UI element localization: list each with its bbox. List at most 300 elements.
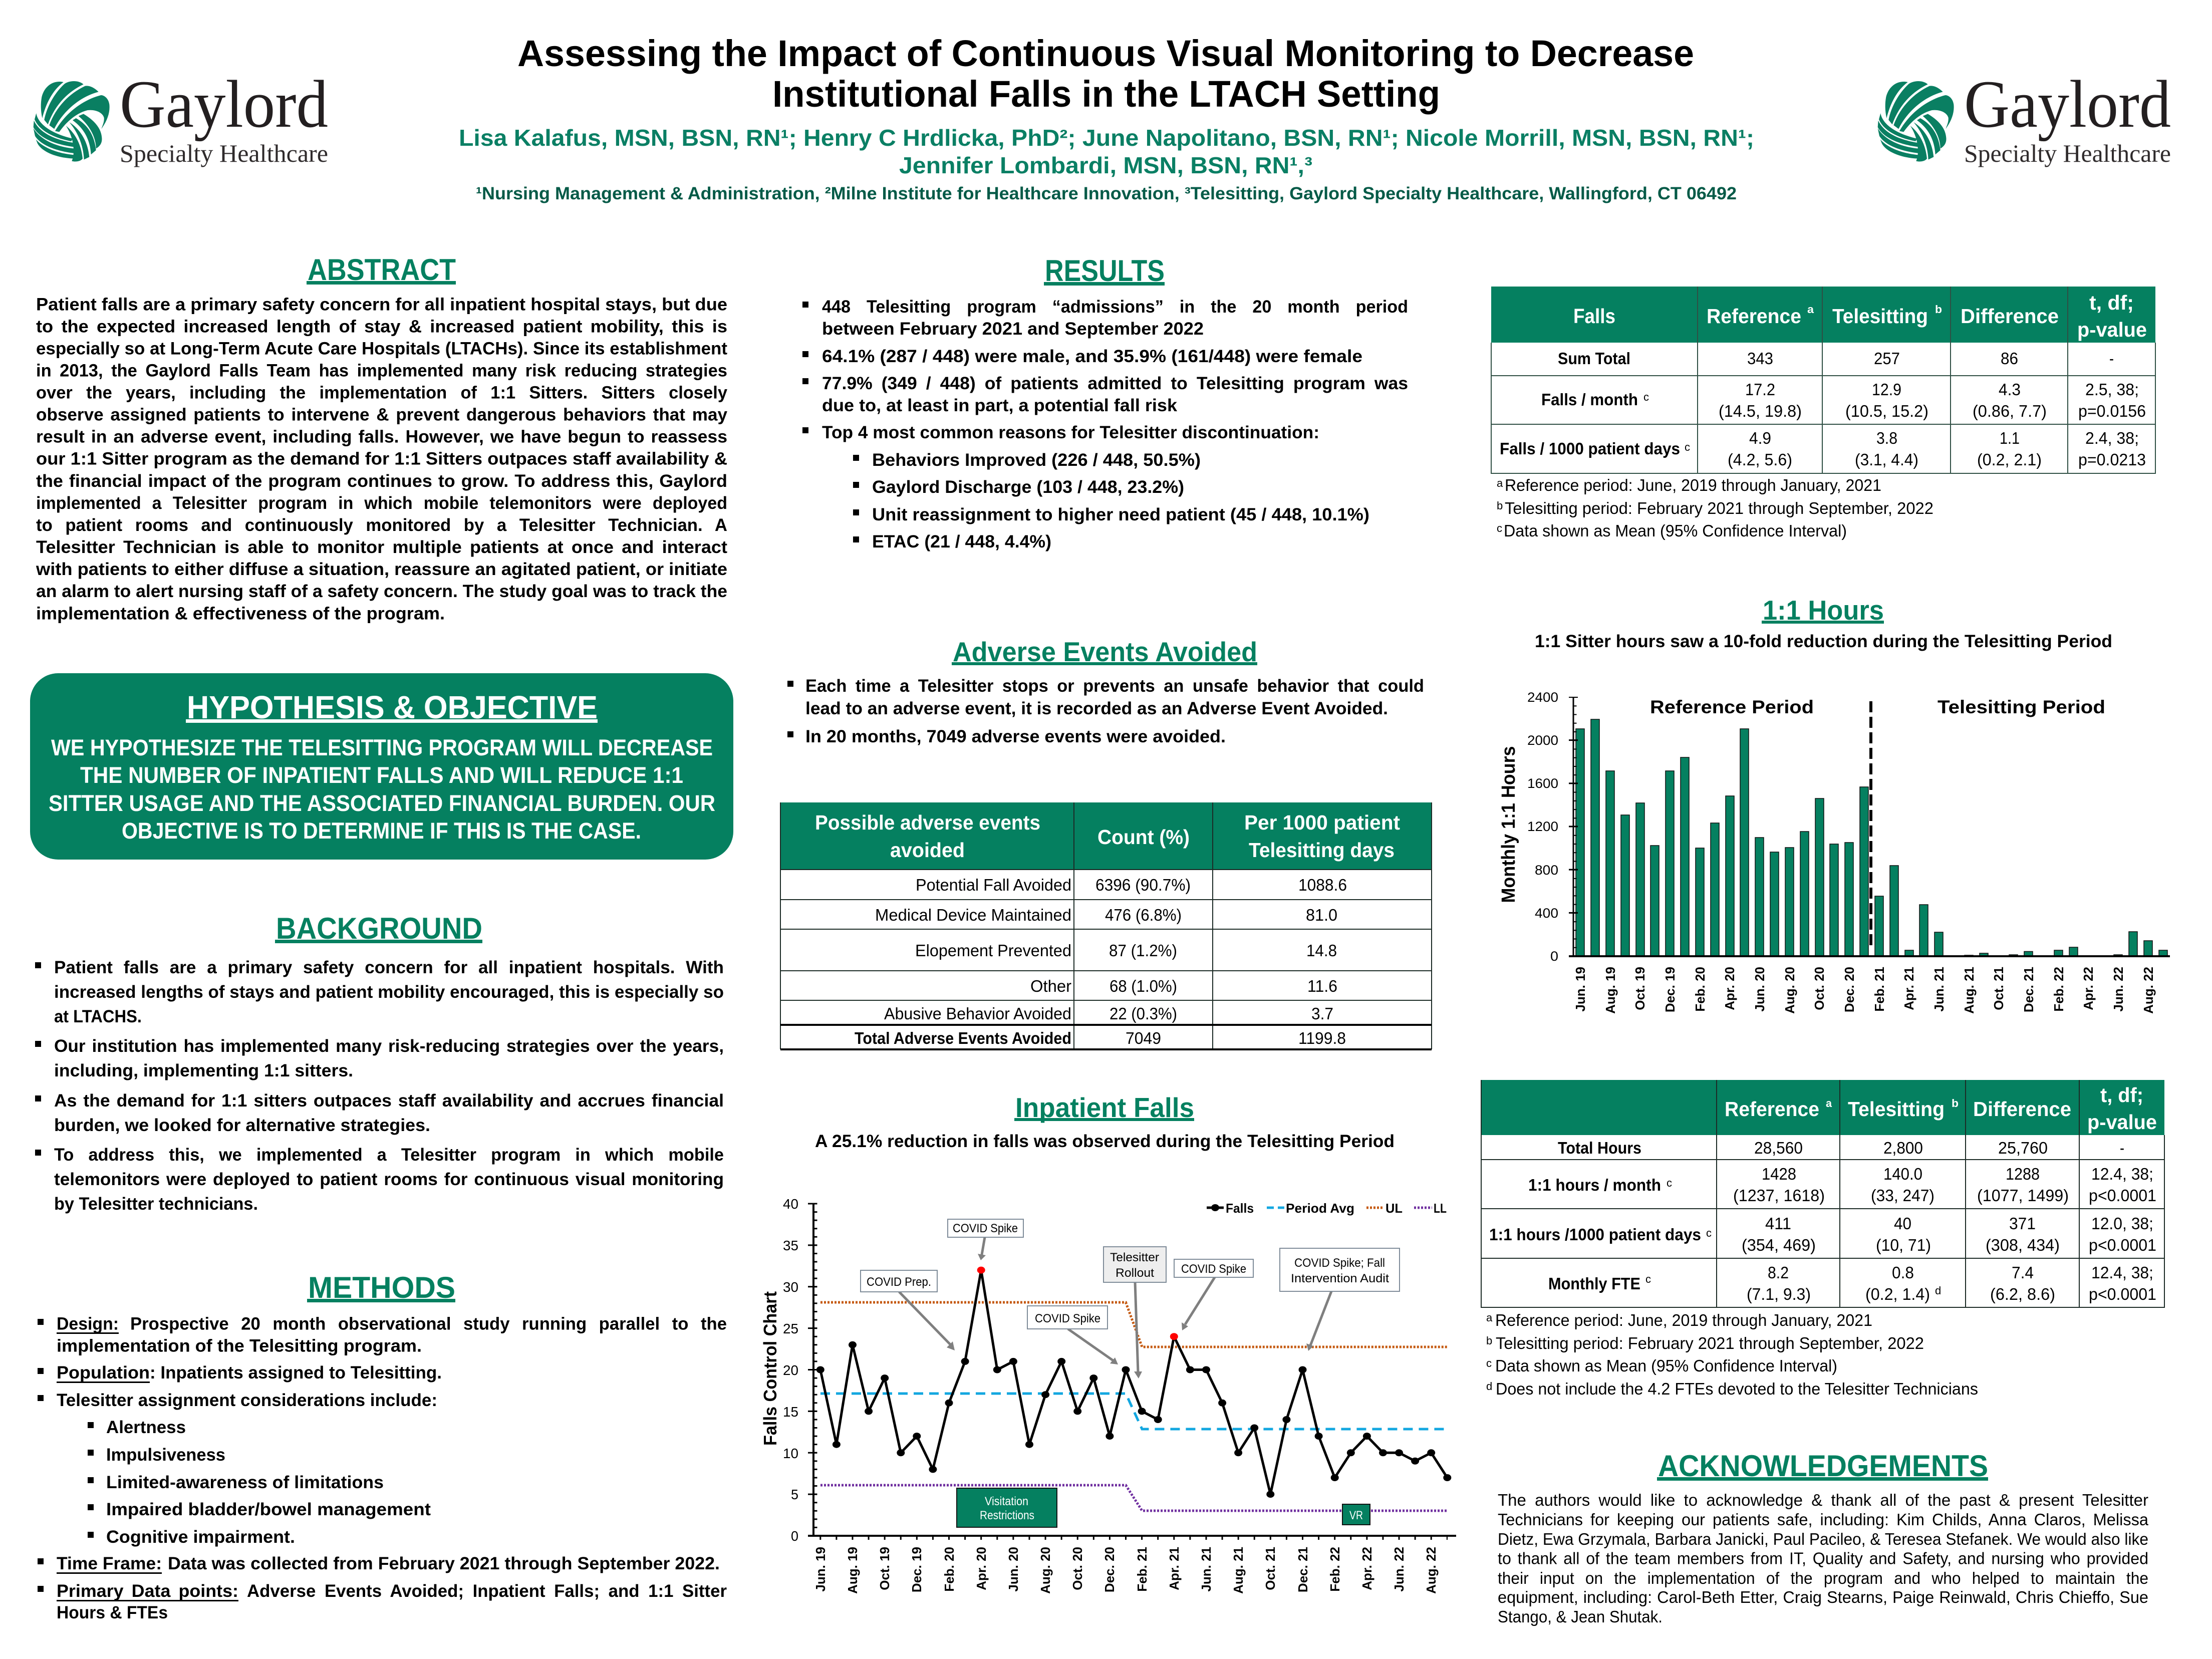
panel: background xyxy=(35,912,724,1214)
text block: hypothesis statement: WE HYPOTHESIZE THE TELESITTING PROGRAM WILL DECREASE xyxy=(51,735,713,760)
footnotes: falls table: Data shown as Mean (95% Confidence Interval) xyxy=(1504,521,1847,540)
panel: results xyxy=(802,254,1408,551)
y axis labels: 20 xyxy=(783,1362,798,1378)
y axis labels: 1200 xyxy=(1527,819,1558,834)
footnotes: 1:1 hours table: d xyxy=(1486,1380,1492,1393)
table: falls: p=0.0156 xyxy=(2078,402,2146,420)
text block: acknowledgements body xyxy=(1498,1491,2149,1626)
table: falls: p-value xyxy=(2077,318,2147,341)
text block: results bullets xyxy=(802,297,1408,551)
text block: abstract body: an alarm to alert nursing staff of a safety concern. The study goal was to track the xyxy=(36,582,727,601)
text block: abstract body: our 1:1 Sitter program as the demand for 1:1 Sitters outpaces staff availability & xyxy=(36,449,727,469)
legend: Falls xyxy=(1226,1201,1254,1216)
table: falls: (0.86, 7.7) xyxy=(1973,402,2047,420)
table: 1:1 hours: 1:1 hours / month xyxy=(1528,1176,1661,1194)
callout: COVID Spike (Dec 20) xyxy=(1027,1306,1108,1329)
callout: COVID Spike (Apr 20) xyxy=(948,1219,1023,1237)
callout: Telesitter Rollout: Telesitter xyxy=(1110,1251,1159,1264)
y axis labels: 35 xyxy=(783,1238,798,1253)
y axis labels: 2400 xyxy=(1527,690,1558,705)
table: 1:1 hours: 12.4, 38; xyxy=(2091,1263,2153,1282)
table: 1:1 hours: - xyxy=(2120,1139,2124,1157)
table: 1:1 hours: p<0.0001 xyxy=(2089,1285,2156,1303)
text block: adverse events bullets xyxy=(787,676,1424,746)
heading: methods: METHODS xyxy=(308,1271,455,1304)
table: 1:1 hours: p<0.0001 xyxy=(2089,1186,2156,1205)
affiliations: ¹Nursing Management & Administration, ²Milne Institute for Healthcare Innovation, ³Telesitting, Gaylord Specialty Healthcare, Wallingford, CT 06492 xyxy=(476,184,1737,203)
table: 1:1 hours: Telesitting xyxy=(1848,1097,1945,1121)
table: falls: 17.2 xyxy=(1745,380,1775,399)
panel: hypothesis and objective xyxy=(30,673,733,860)
text block: background bullets: by Telesitter technicians. xyxy=(54,1194,258,1214)
footnotes: falls table: a xyxy=(1497,477,1503,489)
text block: results bullets: Gaylord Discharge (103 / 448, 23.2%) xyxy=(872,477,1184,497)
footnotes: 1:1 hours table: b xyxy=(1486,1334,1492,1347)
heading: inpatient falls: Inpatient Falls xyxy=(1015,1092,1194,1123)
x axis labels: Apr. 21 xyxy=(1901,967,1916,1010)
x axis labels: Aug. 22 xyxy=(2141,967,2156,1014)
table: 1:1 hours: (6.2, 8.6) xyxy=(1990,1285,2055,1303)
panel: abstract xyxy=(36,253,728,623)
text block: acknowledgements body: Technicians for keeping our patients safe, including: Kim Childs, Anna Claros, Melissa xyxy=(1498,1510,2149,1529)
legend: UL xyxy=(1386,1201,1403,1216)
text block: results bullets: between February 2021 and September 2022 xyxy=(822,319,1204,339)
footnotes: falls table: Telesitting period: February 2021 through September, 2022 xyxy=(1505,499,1933,517)
x axis labels: Aug. 19 xyxy=(1603,967,1618,1014)
table: falls: Difference xyxy=(1961,305,2059,328)
x axis labels: Oct. 19 xyxy=(1632,967,1647,1010)
x axis labels: Feb. 22 xyxy=(1327,1547,1342,1592)
x axis labels: Jun. 20 xyxy=(1752,967,1767,1012)
text block: results bullets: Behaviors Improved (226 / 448, 50.5%) xyxy=(872,450,1201,470)
x axis labels: Dec. 20 xyxy=(1102,1547,1117,1592)
x axis labels: Dec. 20 xyxy=(1842,967,1857,1012)
table: 1:1 hours: 1428 xyxy=(1762,1165,1796,1183)
text block: abstract body: Patient falls are a primary safety concern for all inpatient hospital stays, but due xyxy=(36,295,727,315)
x axis labels: Aug. 20 xyxy=(1038,1547,1053,1594)
x axis labels: Oct. 20 xyxy=(1812,967,1827,1010)
text block: methods bullets: : Inpatients assigned to Telesitting. xyxy=(150,1363,442,1382)
table: 1:1 hours: t, df; xyxy=(2100,1083,2143,1107)
text block: acknowledgements body: Stango, & Jean Shutak. xyxy=(1498,1607,1663,1626)
x axis labels: Jun. 21 xyxy=(1931,967,1947,1012)
text block: background bullets: including, implementing 1:1 sitters. xyxy=(54,1061,353,1080)
heading: acknowledgements: ACKNOWLEDGEMENTS xyxy=(1658,1449,1988,1483)
x axis labels: Jun. 22 xyxy=(2111,967,2126,1012)
text block: methods bullets: Limited-awareness of limitations xyxy=(106,1473,384,1492)
table: 1:1 hours: c xyxy=(1645,1273,1651,1285)
table: 1:1 hours: (10, 71) xyxy=(1876,1236,1931,1254)
y axis labels: 40 xyxy=(783,1196,798,1212)
text block: methods bullets xyxy=(38,1314,727,1622)
table: 1:1 hours: 8.2 xyxy=(1768,1263,1789,1282)
legend: LL xyxy=(1434,1201,1447,1216)
subtitle: 1:1 hours: 1:1 Sitter hours saw a 10-fold reduction during the Telesitting Period xyxy=(1535,632,2112,651)
x axis labels: Feb. 21 xyxy=(1135,1547,1150,1592)
footnotes: falls table: c xyxy=(1497,522,1502,534)
bar chart: monthly 1:1 hours: Telesitting Period xyxy=(1938,697,2105,717)
table: 1:1 hours: 411 xyxy=(1765,1214,1791,1233)
table: 1:1 hours: 7.4 xyxy=(2012,1263,2034,1282)
x axis labels: Dec. 19 xyxy=(1663,967,1678,1012)
text block: abstract body: in 2013, the Gaylord Falls Team has implemented many risk reducing strategies xyxy=(36,361,727,381)
falls series xyxy=(816,1267,1451,1498)
footnotes: 1:1 hours table: Reference period: June, 2019 through January, 2021 xyxy=(1495,1311,1872,1329)
text block: abstract body: result in an adverse event, including falls. However, we have begun to reassess xyxy=(36,427,727,447)
table: 1:1 hours: Difference xyxy=(1973,1097,2071,1121)
x axis labels: Oct. 21 xyxy=(1991,967,2006,1010)
table: falls: 4.3 xyxy=(1999,380,2021,399)
text block: acknowledgements body: The authors would like to acknowledge & thank all of the past & present Telesitter xyxy=(1498,1491,2148,1509)
table: 1:1 hours xyxy=(1481,1080,2164,1307)
icon: green yarn ball (left) xyxy=(34,81,110,162)
footnotes: 1:1 hours table xyxy=(1486,1311,1978,1398)
text block: methods bullets: Population xyxy=(57,1363,150,1382)
table: 1:1 hours: 28,560 xyxy=(1754,1139,1803,1157)
title: Institutional Falls in the LTACH Setting xyxy=(772,73,1440,115)
y axis labels: 15 xyxy=(783,1404,798,1420)
text block: background bullets: As the demand for 1:1 sitters outpaces staff availability and accrues financial xyxy=(54,1091,724,1111)
callout: COVID Spike (Apr 20): COVID Spike xyxy=(953,1222,1018,1235)
table: falls: 3.8 xyxy=(1876,429,1897,447)
panel: adverse events avoided xyxy=(780,636,1432,1050)
text block: results bullets: 448 Telesitting program “admissions” in the 20 month period xyxy=(822,297,1408,317)
x axis labels: Jun. 20 xyxy=(1006,1547,1021,1592)
callout: VR: VR xyxy=(1349,1509,1363,1522)
table: 1:1 hours: (33, 247) xyxy=(1871,1186,1934,1205)
table: possible adverse events avoided: Telesitting days xyxy=(1249,839,1395,862)
text block: adverse events bullets: lead to an adverse event, it is recorded as an Adverse Event Avoided. xyxy=(805,699,1388,718)
footnotes: 1:1 hours table: Telesitting period: February 2021 through September, 2022 xyxy=(1496,1334,1924,1352)
x axis labels: Apr. 20 xyxy=(974,1547,989,1590)
callout: Visitation Restrictions: Visitation xyxy=(985,1495,1028,1508)
text block: abstract body: implementation & effectiveness of the program. xyxy=(36,604,445,623)
table: falls: Reference xyxy=(1707,305,1801,328)
text block: methods bullets: Time Frame: xyxy=(57,1554,162,1573)
callout: COVID Spike; Fall Intervention Audit: Intervention Audit xyxy=(1291,1272,1389,1285)
table: falls: (4.2, 5.6) xyxy=(1728,450,1792,469)
table: 1:1 hours: 12.0, 38; xyxy=(2091,1214,2153,1233)
logo: Gaylord Specialty Healthcare (left): Gaylord xyxy=(120,67,328,142)
table: possible adverse events avoided: Other xyxy=(1030,977,1071,995)
callout: COVID Spike; Fall Intervention Audit: COVID Spike; Fall xyxy=(1294,1256,1385,1270)
text block: acknowledgements body: equipment, including: Carol-Beth Etter, Craig Stearns, Paige Reinwald, Chris Chieffo, Sue xyxy=(1498,1588,2148,1606)
table: possible adverse events avoided: Abusive Behavior Avoided xyxy=(884,1004,1071,1023)
footnotes: 1:1 hours table: Does not include the 4.2 FTEs devoted to the Telesitter Technicians xyxy=(1496,1379,1978,1398)
text block: methods bullets: implementation of the Telesitting program. xyxy=(57,1336,422,1355)
table: falls: t, df; xyxy=(2089,291,2134,314)
table: falls: Falls / month xyxy=(1541,390,1638,409)
text block: methods bullets: Design: xyxy=(57,1314,119,1333)
text block: hypothesis statement: SITTER USAGE AND THE ASSOCIATED FINANCIAL BURDEN. OUR xyxy=(49,790,715,816)
x axis labels: Oct. 19 xyxy=(877,1547,892,1590)
title: Assessing the Impact of Continuous Visual Monitoring to Decrease xyxy=(517,33,1694,74)
table: falls: 1.1 xyxy=(2000,429,2020,447)
table: 1:1 hours: (354, 469) xyxy=(1742,1236,1816,1254)
y axis labels: 25 xyxy=(783,1321,798,1336)
text block: background bullets: increased lengths of stays and patient mobility encouraged, this is especially so xyxy=(54,982,724,1002)
table: falls: (14.5, 19.8) xyxy=(1719,402,1802,420)
text block: adverse events bullets: Each time a Telesitter stops or prevents an unsafe behavior that could xyxy=(805,676,1424,696)
table: falls: b xyxy=(1935,303,1942,316)
heading: background: BACKGROUND xyxy=(276,912,482,945)
callout: Visitation Restrictions: Restrictions xyxy=(980,1509,1034,1522)
table: possible adverse events avoided: 476 (6.8%) xyxy=(1105,906,1182,924)
x axis labels: Aug. 21 xyxy=(1962,967,1977,1014)
table: falls: 2.5, 38; xyxy=(2085,380,2139,399)
x axis labels: Jun. 21 xyxy=(1199,1547,1214,1592)
callout: COVID Prep.: COVID Prep. xyxy=(867,1275,931,1289)
logo: Gaylord Specialty Healthcare (left): Specialty Healthcare xyxy=(120,139,328,167)
table: 1:1 hours: Monthly FTE xyxy=(1548,1274,1640,1293)
table: 1:1 hours: (0.2, 1.4) xyxy=(1865,1285,1930,1303)
x axis labels: Oct. 21 xyxy=(1263,1547,1278,1590)
text block: background bullets xyxy=(35,958,724,1214)
heading: results: RESULTS xyxy=(1045,254,1165,288)
x axis labels: Aug. 19 xyxy=(845,1547,860,1594)
table: falls: Falls xyxy=(1573,305,1615,328)
text block: background bullets: To address this, we implemented a Telesitter program in which mobile xyxy=(54,1145,724,1165)
legend xyxy=(1207,1201,1447,1216)
y axis labels: 5 xyxy=(791,1487,798,1502)
text block: abstract body: implemented a Telesitter program in which mobile telemonitors were deployed xyxy=(36,493,727,513)
table: possible adverse events avoided: 3.7 xyxy=(1311,1004,1333,1023)
table: possible adverse events avoided: 1088.6 xyxy=(1298,876,1347,894)
text block: hypothesis statement xyxy=(49,735,715,844)
table: falls: 257 xyxy=(1874,349,1900,368)
legend: Period Avg xyxy=(1286,1201,1354,1216)
arrows xyxy=(899,1237,1331,1378)
y axis labels xyxy=(1527,690,1558,964)
text block: methods bullets: Primary Data points: xyxy=(57,1581,238,1601)
footnotes: falls table xyxy=(1497,476,1933,540)
footnotes: falls table: Reference period: June, 2019 through January, 2021 xyxy=(1505,476,1881,494)
icon: green yarn ball (right) xyxy=(1878,81,1954,162)
footnotes: falls table: b xyxy=(1497,499,1503,512)
table: possible adverse events avoided: 22 (0.3%) xyxy=(1110,1004,1177,1023)
table: possible adverse events avoided: Count (%) xyxy=(1097,825,1190,849)
table: falls: (10.5, 15.2) xyxy=(1845,402,1928,420)
footnotes: 1:1 hours table: c xyxy=(1486,1357,1492,1369)
table: 1:1 hours: 2,800 xyxy=(1883,1139,1923,1157)
callout: COVID Spike (Apr 21) xyxy=(1174,1259,1253,1277)
text block: background bullets: burden, we looked for alternative strategies. xyxy=(54,1116,430,1135)
callout: COVID Prep. xyxy=(861,1270,937,1292)
x axis labels: Feb. 20 xyxy=(1693,967,1708,1012)
line chart: falls control chart xyxy=(760,1196,1456,1594)
table: falls: a xyxy=(1807,303,1814,316)
table: possible adverse events avoided: 87 (1.2%) xyxy=(1109,941,1177,960)
table: 1:1 hours: (1077, 1499) xyxy=(1977,1186,2069,1205)
x axis labels: Aug. 20 xyxy=(1782,967,1797,1014)
table: possible adverse events avoided: 68 (1.0%) xyxy=(1110,977,1177,995)
table: possible adverse events avoided xyxy=(780,802,1432,1050)
x axis labels: Aug. 21 xyxy=(1231,1547,1246,1594)
y axis labels: 30 xyxy=(783,1279,798,1295)
text block: abstract body: observe assigned patients to intervene & prevent dangerous behaviors that may xyxy=(36,405,728,425)
table: 1:1 hours: 12.4, 38; xyxy=(2091,1165,2153,1183)
text block: background bullets: telemonitors were deployed to patient rooms for continuous visual monitoring xyxy=(54,1170,724,1189)
bar chart: monthly 1:1 hours: Reference Period xyxy=(1650,697,1814,717)
callout: COVID Spike (Apr 21): COVID Spike xyxy=(1181,1262,1246,1276)
text block: abstract body: to the expected increased length of stay & increased patient mobility, this is xyxy=(36,317,727,337)
title xyxy=(517,33,1694,115)
table: falls: 2.4, 38; xyxy=(2085,429,2139,447)
table: 1:1 hours: b xyxy=(1952,1097,1959,1110)
text block: acknowledgements body: to thank all of the team members from IT, Quality and Safety, and nursing who provided xyxy=(1498,1549,2148,1568)
table: falls: c xyxy=(1685,441,1690,453)
text block: results bullets: Unit reassignment to higher need patient (45 / 448, 10.1%) xyxy=(872,505,1369,524)
text block: methods bullets: Alertness xyxy=(106,1418,186,1437)
table: 1:1 hours: 1288 xyxy=(2006,1165,2040,1183)
table: 1:1 hours: (1237, 1618) xyxy=(1733,1186,1825,1205)
table: 1:1 hours: (308, 434) xyxy=(1986,1236,2060,1254)
table: 1:1 hours: 371 xyxy=(2009,1214,2036,1233)
text block: methods bullets: Data was collected from February 2021 through September 2022. xyxy=(168,1554,720,1573)
text block: abstract body xyxy=(36,295,728,623)
callout: COVID Spike; Fall Intervention Audit xyxy=(1280,1248,1400,1291)
heading: 1:1 hours: 1:1 Hours xyxy=(1763,595,1884,626)
y axis labels: 400 xyxy=(1535,906,1558,921)
text block: hypothesis statement: THE NUMBER OF INPATIENT FALLS AND WILL REDUCE 1:1 xyxy=(80,762,683,788)
x axis labels xyxy=(813,1547,1439,1594)
table: possible adverse events avoided: 6396 (90.7%) xyxy=(1095,876,1191,894)
x axis labels: Aug. 22 xyxy=(1424,1547,1439,1594)
table: 1:1 hours: 25,760 xyxy=(1998,1139,2048,1157)
y axis labels: 1600 xyxy=(1527,776,1558,791)
table: falls xyxy=(1491,287,2155,473)
table: 1:1 hours: d xyxy=(1935,1284,1941,1297)
logo: Gaylord Specialty Healthcare (right) xyxy=(1878,67,2171,167)
text block: abstract body: Telesitter Technician is able to monitor multiple patients at once and interact xyxy=(36,537,727,557)
table: falls: c xyxy=(1643,391,1649,403)
text block: abstract body: especially so at Long-Term Acute Care Hospitals (LTACHs). Since its establishment xyxy=(36,339,727,359)
x axis labels: Dec. 19 xyxy=(909,1547,924,1592)
x axis labels: Apr. 21 xyxy=(1167,1547,1182,1590)
text block: methods bullets: Cognitive impairment. xyxy=(106,1527,295,1547)
x axis labels: Oct. 20 xyxy=(1070,1547,1085,1590)
table: falls: Falls / 1000 patient days xyxy=(1500,439,1680,458)
x axis labels: Apr. 20 xyxy=(1722,967,1737,1010)
bars xyxy=(1576,719,2167,956)
x axis labels: Jun. 19 xyxy=(1573,967,1588,1012)
table: possible adverse events avoided: 7049 xyxy=(1126,1029,1161,1047)
text block: methods bullets: Prospective 20 month observational study running parallel to the xyxy=(130,1314,727,1333)
callout: Visitation Restrictions xyxy=(957,1488,1057,1527)
table: falls: 4.9 xyxy=(1749,429,1771,447)
x axis labels: Apr. 22 xyxy=(1359,1547,1374,1590)
table: possible adverse events avoided: 81.0 xyxy=(1306,906,1337,924)
table: falls: Telesitting xyxy=(1832,305,1928,328)
table: possible adverse events avoided: Total Adverse Events Avoided xyxy=(855,1029,1071,1047)
table: falls: - xyxy=(2109,349,2114,368)
text block: results bullets: 64.1% (287 / 448) were male, and 35.9% (161/448) were female xyxy=(822,347,1362,366)
table: falls: 86 xyxy=(2001,349,2018,368)
table: 1:1 hours: Total Hours xyxy=(1558,1139,1641,1157)
bar chart: monthly 1:1 hours: Monthly 1:1 Hours xyxy=(1498,746,1519,903)
heading: adverse events avoided: Adverse Events Avoided xyxy=(953,636,1257,667)
callout: Telesitter Rollout: Rollout xyxy=(1116,1266,1154,1280)
authors: Lisa Kalafus, MSN, BSN, RN¹; Henry C Hrdlicka, PhD²; June Napolitano, BSN, RN¹; Nicole Morrill, MSN, BSN, RN¹; xyxy=(459,125,1754,151)
callout: COVID Spike (Dec 20): COVID Spike xyxy=(1035,1312,1100,1325)
text block: adverse events bullets: In 20 months, 7049 adverse events were avoided. xyxy=(805,727,1226,746)
text block: results bullets: due to, at least in part, a potential fall risk xyxy=(822,396,1178,415)
x axis labels: Dec. 21 xyxy=(1295,1547,1310,1592)
panel: methods xyxy=(38,1271,727,1622)
text block: abstract body: with patients to either diffuse a situation, reassure an agitated patient, or initiate xyxy=(36,560,727,579)
text block: hypothesis statement: OBJECTIVE IS TO DETERMINE IF THIS IS THE CASE. xyxy=(122,818,641,844)
table: possible adverse events avoided: 11.6 xyxy=(1307,977,1337,995)
panel: acknowledgements xyxy=(1498,1449,2149,1626)
table: possible adverse events avoided: Elopement Prevented xyxy=(915,941,1071,960)
x axis labels xyxy=(1573,967,2156,1014)
y axis title: Falls Control Chart xyxy=(760,1291,780,1446)
x axis labels: Feb. 22 xyxy=(2051,967,2066,1012)
text block: abstract body: the financial impact of the program continues to grow. To address this, Gaylord xyxy=(36,471,727,491)
table: 1:1 hours: 0.8 xyxy=(1892,1263,1914,1282)
divider: reference vs telesitting xyxy=(1869,701,1872,946)
text block: results bullets: ETAC (21 / 448, 4.4%) xyxy=(872,532,1051,551)
table: 1:1 hours: 40 xyxy=(1894,1214,1911,1233)
y axis labels: 10 xyxy=(783,1446,798,1461)
text block: methods bullets: Impulsiveness xyxy=(106,1445,225,1465)
table: 1:1 hours: a xyxy=(1826,1097,1832,1110)
table: possible adverse events avoided: Medical Device Maintained xyxy=(875,906,1071,924)
text block: methods bullets: Hours & FTEs xyxy=(57,1603,168,1622)
x axis labels: Feb. 21 xyxy=(1872,967,1887,1012)
y axis labels: 0 xyxy=(791,1528,798,1544)
table: possible adverse events avoided: 14.8 xyxy=(1306,941,1337,960)
table: falls: p=0.0213 xyxy=(2078,450,2146,469)
callout: Telesitter Rollout xyxy=(1103,1247,1166,1282)
text block: methods bullets: Telesitter assignment considerations include: xyxy=(57,1391,437,1410)
text block: background bullets: Patient falls are a primary safety concern for all inpatient hospitals. With xyxy=(54,958,724,977)
table: possible adverse events avoided: Potential Fall Avoided xyxy=(916,876,1071,894)
footnotes: 1:1 hours table: a xyxy=(1486,1311,1493,1324)
heading: abstract: ABSTRACT xyxy=(308,253,456,287)
authors xyxy=(459,125,1754,178)
table: falls: 12.9 xyxy=(1872,380,1901,399)
y axis labels xyxy=(783,1196,798,1544)
text block: abstract body: over the years, including the implementation of 1:1 Sitters. Sitters closely xyxy=(36,383,728,403)
table: possible adverse events avoided: Per 1000 patient xyxy=(1244,811,1400,834)
table: falls: 343 xyxy=(1747,349,1773,368)
text block: acknowledgements body: their input on the implementation of the program and who helped to maintain the xyxy=(1498,1569,2148,1587)
x axis labels: Apr. 22 xyxy=(2081,967,2096,1010)
text block: methods bullets: Impaired bladder/bowel management xyxy=(106,1500,431,1519)
text block: results bullets: 77.9% (349 / 448) of patients admitted to Telesitting program was xyxy=(822,374,1408,393)
x axis labels: Feb. 20 xyxy=(942,1547,957,1592)
table: 1:1 hours: c xyxy=(1706,1227,1712,1239)
table: possible adverse events avoided: Possible adverse events xyxy=(815,811,1040,834)
table: 1:1 hours: p<0.0001 xyxy=(2089,1236,2156,1254)
table: possible adverse events avoided: avoided xyxy=(890,839,965,862)
table: falls: Sum Total xyxy=(1558,349,1630,368)
table: 1:1 hours: Reference xyxy=(1725,1097,1819,1121)
y axis labels: 2000 xyxy=(1527,733,1558,748)
table: falls: (0.2, 2.1) xyxy=(1977,450,2042,469)
text block: abstract body: to patient rooms and continuously monitored by a Telesitter Technician. A xyxy=(36,515,727,535)
logo: Gaylord Specialty Healthcare (right): Gaylord xyxy=(1964,67,2171,142)
authors: Jennifer Lombardi, MSN, BSN, RN¹,³ xyxy=(899,152,1312,178)
x axis labels: Jun. 19 xyxy=(813,1547,828,1592)
x axis labels: Jun. 22 xyxy=(1392,1547,1407,1592)
text block: acknowledgements body: Dietz, Ewa Grzymala, Barbara Janicki, Paul Pacileo, & Teresea Stefanek. We would also like xyxy=(1498,1530,2148,1548)
y axis labels: 800 xyxy=(1535,863,1558,878)
text block: results bullets: Top 4 most common reasons for Telesitter discontinuation: xyxy=(822,423,1319,442)
table: 1:1 hours: p-value xyxy=(2087,1111,2157,1134)
logo: Gaylord Specialty Healthcare (left) xyxy=(34,67,328,167)
